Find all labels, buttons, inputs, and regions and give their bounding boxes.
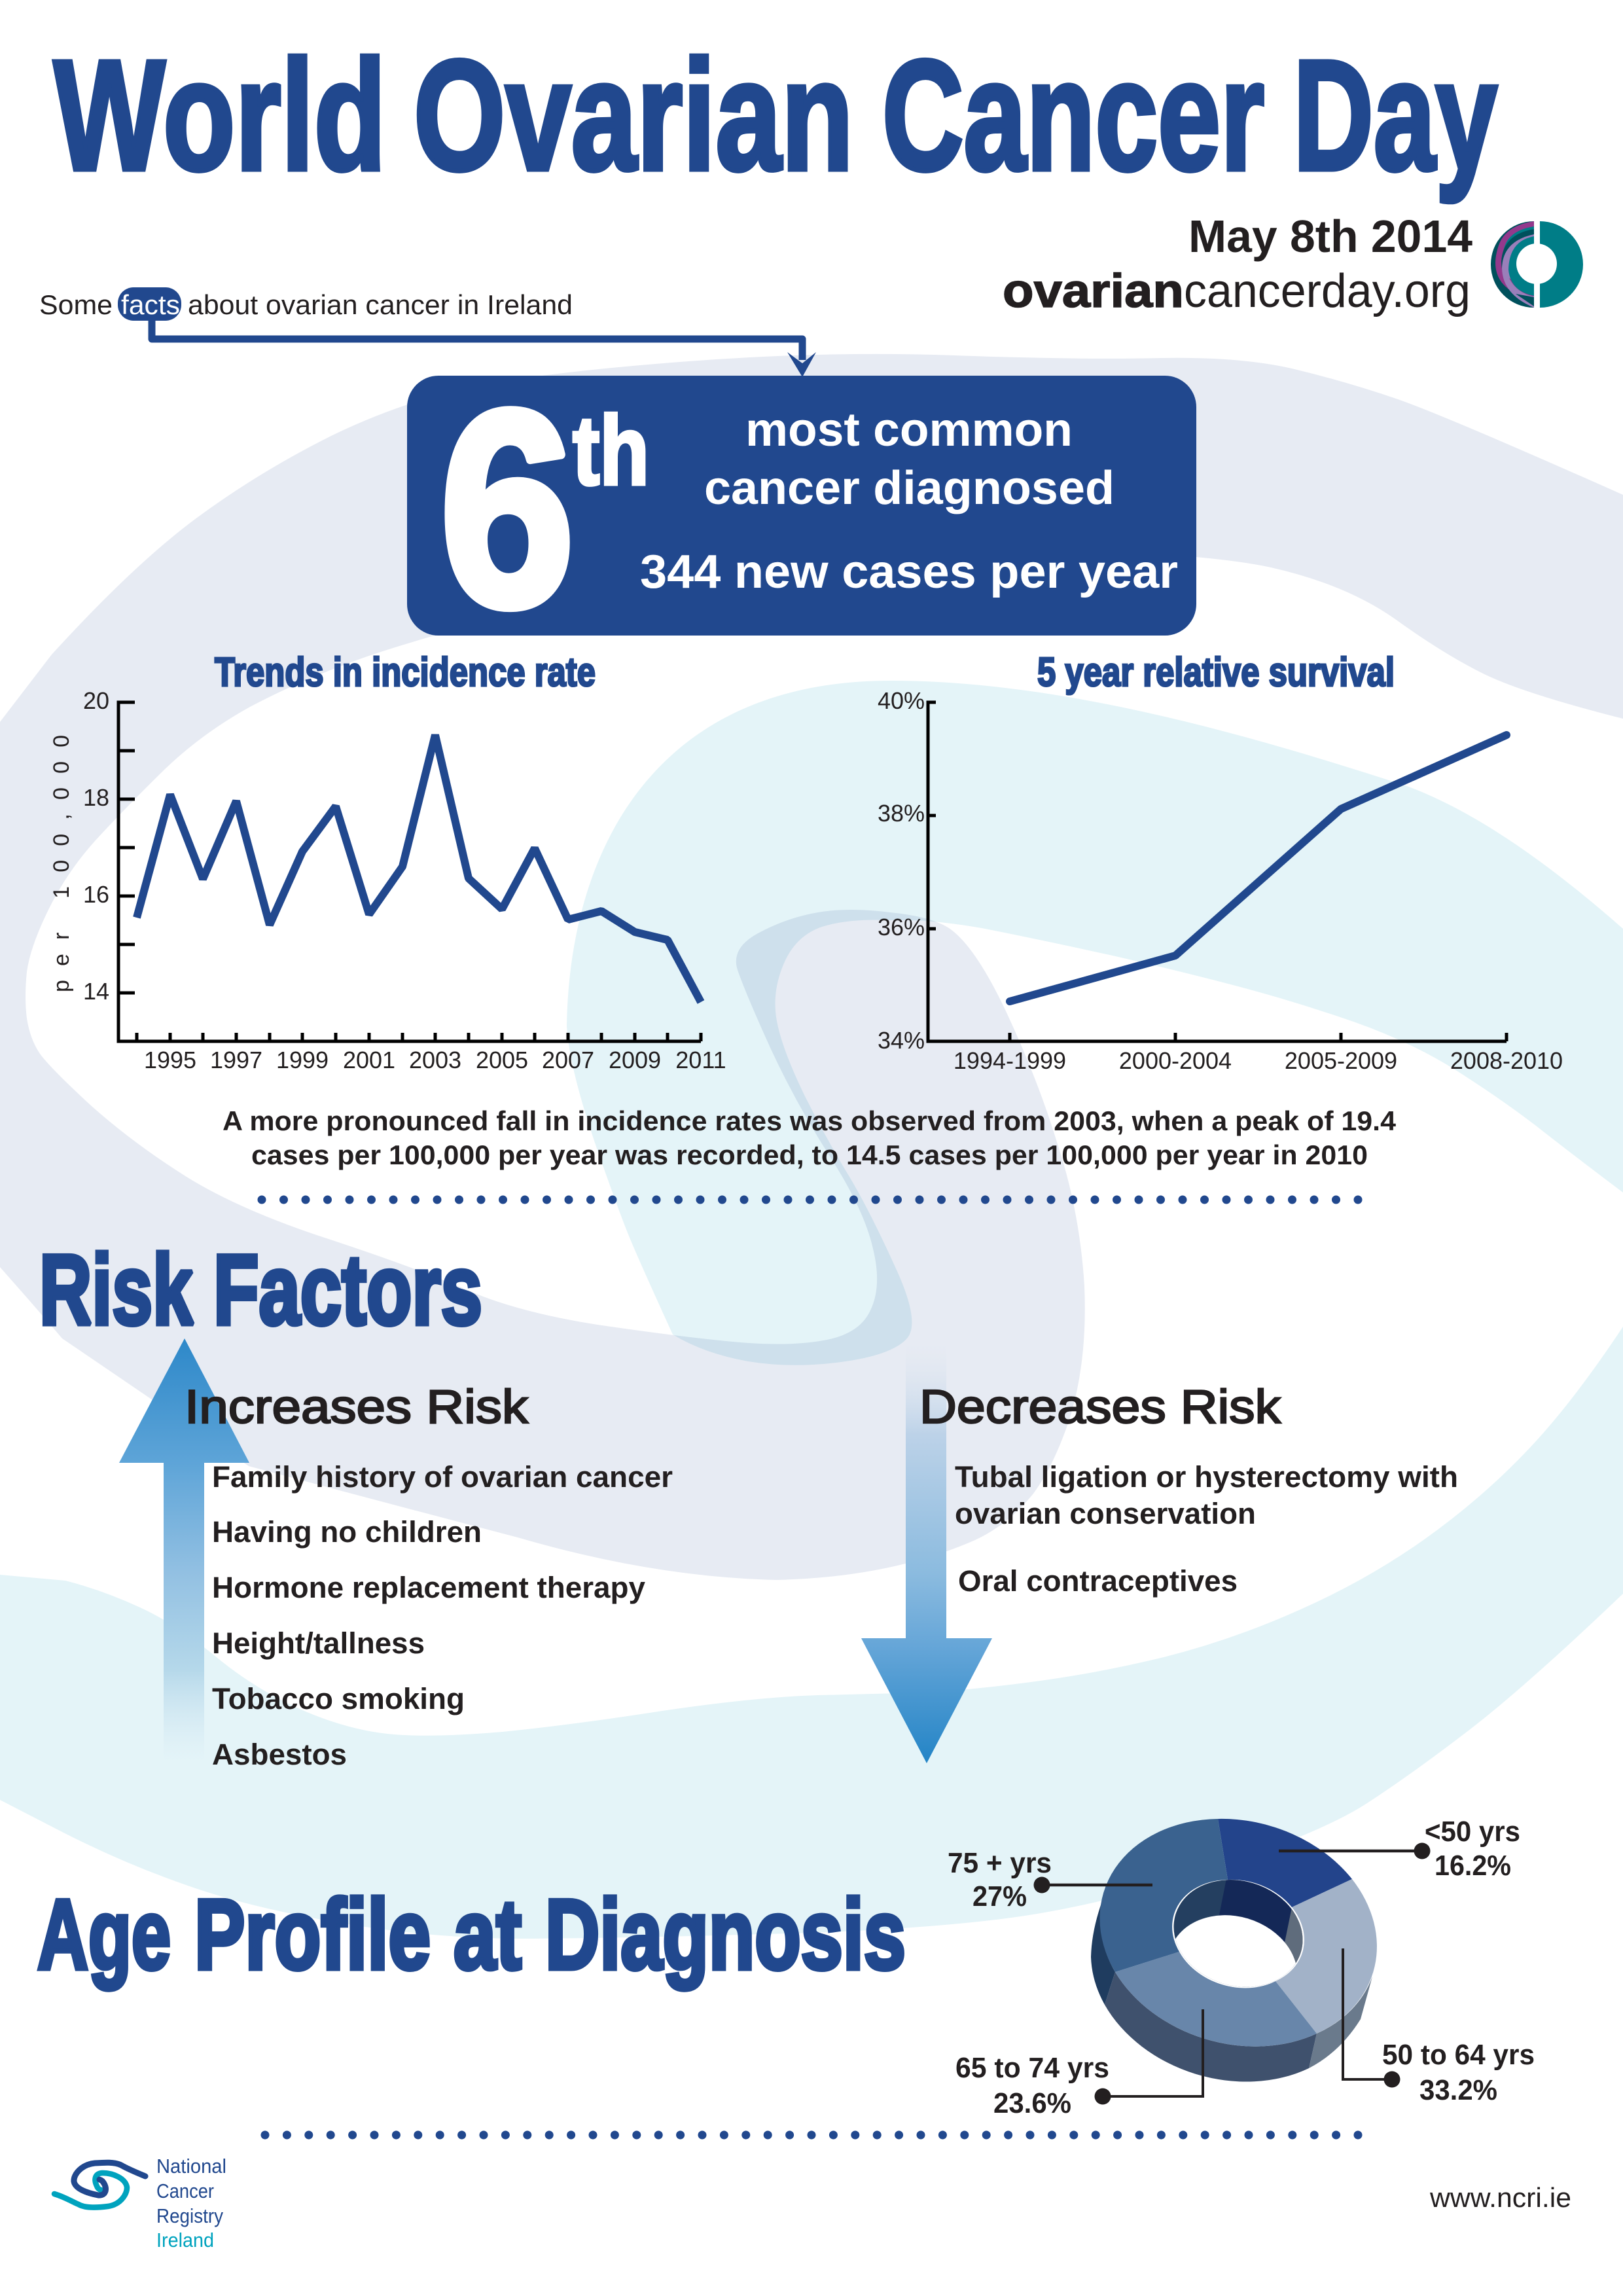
heading: risk factors: Factors <box>213 1234 482 1346</box>
panel: increases risk list: Height/tallness <box>212 1626 425 1660</box>
title: World <box>54 27 386 203</box>
panel: decreases risk list: ovarian conservation <box>955 1497 1256 1530</box>
callout: 75 plus years: 75 + yrs <box>948 1847 1052 1879</box>
arrow: decreases risk <box>861 1342 992 1763</box>
panel: 6th most common cancer: most common <box>745 404 1073 456</box>
line chart: relative survival: 36% <box>878 914 925 941</box>
website: ovariancancerday.org <box>1003 265 1471 317</box>
line chart: incidence rate: 1999 <box>276 1047 329 1073</box>
panel: 6th most common cancer: 344 new cases per year <box>640 546 1178 598</box>
text block: national cancer registry ireland: Cancer <box>156 2179 214 2202</box>
line chart: incidence rate: 1997 <box>210 1047 262 1073</box>
heading: risk factors <box>39 1234 482 1346</box>
callout: 50 to 64 years: 33.2% <box>1419 2074 1497 2106</box>
callout: 75 plus years: 27% <box>972 1880 1027 1912</box>
heading: trends in incidence rate: Trends in incidence rate <box>215 650 596 695</box>
line chart: incidence rate: 16 <box>83 881 109 908</box>
line chart: relative survival: 40% <box>878 687 925 714</box>
panel: increases risk list: Tobacco smoking <box>212 1682 465 1715</box>
panel: increases risk list: Family history of ovarian cancer <box>212 1460 673 1494</box>
panel: increases risk list <box>185 1381 673 1771</box>
panel: increases risk list: Having no children <box>212 1515 482 1549</box>
line chart: relative survival: 2005-2009 <box>1285 1047 1397 1074</box>
line chart: incidence rate: per 100,000 <box>49 735 74 992</box>
text block: national cancer registry ireland: Ireland <box>156 2229 214 2251</box>
heading: age profile at diagnosis: Diagnosis <box>545 1879 906 1990</box>
panel: 6th most common cancer <box>407 353 1196 664</box>
text block: incidence summary <box>223 1105 1397 1170</box>
intro text: some facts: about ovarian cancer in Ireland <box>188 289 573 320</box>
intro text: some facts: Some <box>39 289 113 320</box>
line chart: incidence rate: 2001 <box>343 1047 395 1073</box>
line chart: relative survival: 38% <box>878 800 925 827</box>
title <box>54 27 1497 203</box>
icon: ovarian cancer day logo <box>1491 221 1583 308</box>
line chart: incidence rate: 1995 <box>144 1047 196 1073</box>
website: ovariancancerday.org: cancerday.org <box>1184 265 1471 317</box>
line chart: relative survival: 2008-2010 <box>1450 1047 1563 1074</box>
line chart: incidence rate <box>49 687 726 1073</box>
donut chart: age profile <box>1091 1819 1377 2082</box>
callout: under 50 years: 16.2% <box>1435 1850 1511 1882</box>
intro text: some facts <box>39 287 573 321</box>
text block: national cancer registry ireland <box>156 2155 226 2251</box>
callout: 65 to 74 years: 65 to 74 yrs <box>955 2052 1109 2084</box>
text block: incidence summary: cases per 100,000 per year was recorded, to 14.5 cases per 100,000 per year in 2010 <box>251 1139 1368 1170</box>
arrow: increases risk <box>119 1338 249 1763</box>
line chart: incidence rate: 14 <box>83 978 109 1005</box>
panel: increases risk list: Increases Risk <box>185 1381 529 1433</box>
line chart: incidence rate: 18 <box>83 784 109 811</box>
line chart: incidence rate: 2005 <box>476 1047 528 1073</box>
heading: 5 year relative survival: 5 year relative survival <box>1037 650 1395 695</box>
panel: decreases risk list: Decreases Risk <box>919 1381 1281 1433</box>
text block: national cancer registry ireland: National <box>156 2155 226 2178</box>
panel: 6th most common cancer: cancer diagnosed <box>704 462 1115 514</box>
panel: increases risk list: Asbestos <box>212 1738 347 1771</box>
line chart: relative survival: 1994-1999 <box>954 1047 1066 1074</box>
title: Ovarian <box>414 27 853 203</box>
panel: 6th most common cancer: 6 <box>440 353 575 664</box>
panel: decreases risk list <box>919 1381 1458 1598</box>
background swirl <box>0 354 1623 1939</box>
line chart: incidence rate: 2011 <box>675 1047 726 1073</box>
line chart: incidence rate: 2009 <box>609 1047 661 1073</box>
panel: increases risk list: Hormone replacement therapy <box>212 1571 645 1604</box>
callout: under 50 years <box>1279 1816 1520 1882</box>
line chart: incidence rate: 2003 <box>409 1047 461 1073</box>
callout: 75 plus years <box>948 1847 1152 1912</box>
heading: age profile at diagnosis: at <box>454 1879 522 1990</box>
line chart: relative survival <box>878 687 1563 1074</box>
panel: decreases risk list: Tubal ligation or hysterectomy with <box>955 1460 1458 1494</box>
heading: risk factors: Risk <box>39 1234 193 1346</box>
title: Day <box>1293 27 1497 203</box>
text block: incidence summary: A more pronounced fall in incidence rates was observed from 2003, when a peak of 19.4 <box>223 1105 1397 1136</box>
side wall: 75+ <box>1091 1901 1115 2005</box>
callout: 50 to 64 years: 50 to 64 yrs <box>1382 2039 1535 2071</box>
heading: age profile at diagnosis: Age <box>37 1879 171 1990</box>
date: May 8th 2014 <box>1188 211 1472 262</box>
line chart: relative survival: 2000-2004 <box>1119 1047 1232 1074</box>
website: ncri.ie: www.ncri.ie <box>1429 2182 1571 2213</box>
line chart: incidence rate: 2007 <box>542 1047 594 1073</box>
callout: under 50 years: <50 yrs <box>1425 1816 1520 1848</box>
website: ovariancancerday.org: ovarian <box>1003 265 1184 317</box>
intro text: some facts: facts <box>121 289 180 320</box>
line chart: incidence rate: 20 <box>83 687 109 714</box>
panel: decreases risk list: Oral contraceptives <box>958 1564 1238 1598</box>
callout: 65 to 74 years: 23.6% <box>993 2087 1071 2119</box>
title: Cancer <box>882 27 1264 203</box>
callout: 50 to 64 years <box>1343 1948 1535 2106</box>
text block: national cancer registry ireland: Registry <box>156 2204 223 2227</box>
line chart: relative survival: 34% <box>878 1027 925 1054</box>
icon: national cancer registry logo <box>54 2162 145 2208</box>
arrow: facts to highlight box <box>152 319 816 377</box>
heading: age profile at diagnosis: Profile <box>194 1879 431 1990</box>
panel: 6th most common cancer: th <box>573 395 649 505</box>
callout: 65 to 74 years <box>955 2009 1203 2119</box>
heading: age profile at diagnosis <box>37 1879 906 1990</box>
